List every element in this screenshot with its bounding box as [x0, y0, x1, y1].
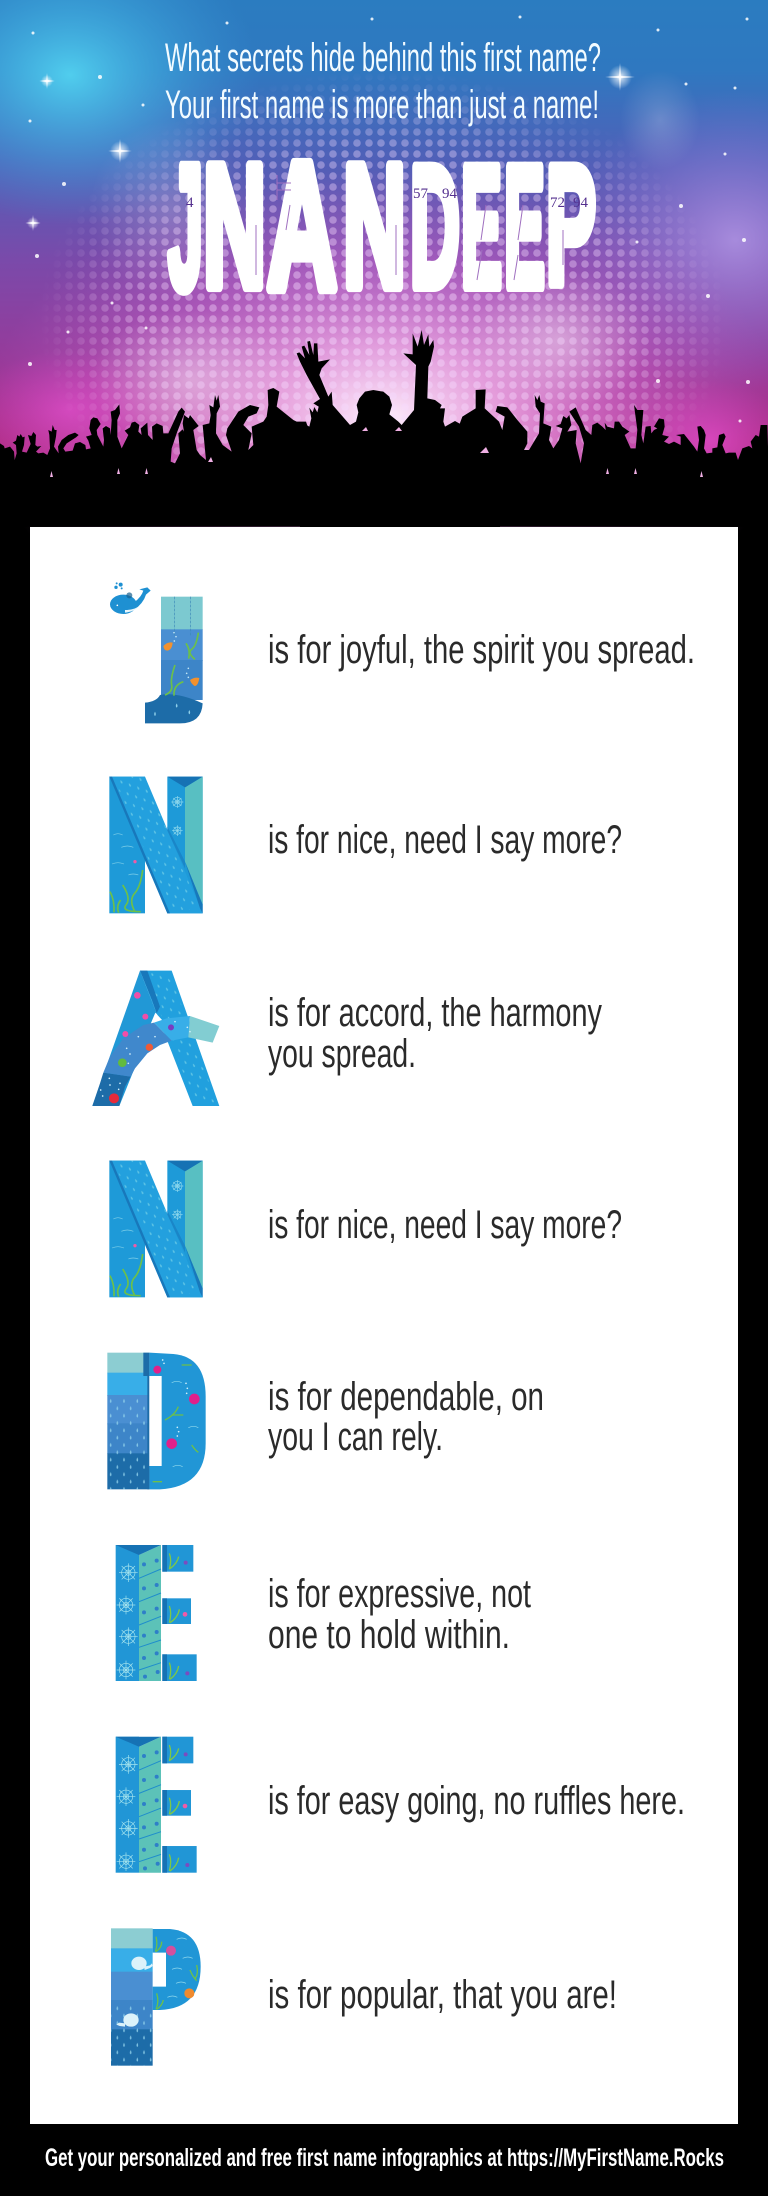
- title: JNANDEEP: P: [546, 132, 596, 319]
- title: JNANDEEP: E: [461, 131, 502, 323]
- stars and sparkles: [25, 16, 750, 422]
- row D: text: [268, 1375, 544, 1459]
- title: JNANDEEP: E: [504, 131, 545, 323]
- white content panel: [30, 527, 738, 2124]
- row E: text: one to hold within.: [268, 1613, 510, 1657]
- row A: letter icon: [92, 971, 219, 1106]
- title: JNANDEEP: N: [203, 130, 266, 324]
- title: JNANDEEP: D: [410, 131, 460, 323]
- title: JNANDEEP: N: [343, 130, 406, 324]
- row D: text: is for dependable, on: [268, 1375, 544, 1419]
- title: JNANDEEP: 94: [573, 195, 588, 211]
- header concert background: [0, 0, 768, 527]
- crowd silhouette: [0, 330, 768, 527]
- title: JNANDEEP: J: [168, 129, 203, 326]
- row P: letter icon: [111, 1928, 201, 2066]
- row A: text: is for accord, the harmony: [268, 991, 602, 1035]
- title: JNANDEEP: 57: [413, 186, 428, 202]
- row N: letter icon: [109, 777, 203, 913]
- heading tagline: [165, 36, 601, 127]
- icon: pale whales: [116, 1957, 153, 2027]
- central figure with raised hands: [283, 330, 477, 455]
- row E: letter icon: [116, 1545, 197, 1681]
- title: JNANDEEP: 94: [442, 186, 458, 202]
- row N second: letter icon: [109, 1161, 203, 1297]
- row N: text: is for nice, need I say more?: [268, 818, 622, 862]
- row N second: text: is for nice, need I say more?: [268, 1203, 622, 1247]
- title: JNANDEEP: A: [267, 125, 337, 326]
- row D: letter icon: [107, 1353, 206, 1489]
- row E second: letter icon: [116, 1737, 197, 1873]
- row E: text: is for expressive, not: [268, 1572, 531, 1616]
- row E: text: [268, 1572, 531, 1657]
- row J: letter icon with whale: [110, 582, 203, 723]
- icon: whale: [110, 582, 151, 614]
- title: JNANDEEP: 72: [550, 195, 565, 211]
- title: JNANDEEP: 4: [186, 195, 194, 211]
- row A: text: you spread.: [268, 1032, 416, 1076]
- title: JNANDEEP: [168, 125, 596, 326]
- row A: text: [268, 991, 602, 1076]
- row P: text: is for popular, that you are!: [268, 1973, 617, 2017]
- row D: text: you I can rely.: [268, 1415, 443, 1459]
